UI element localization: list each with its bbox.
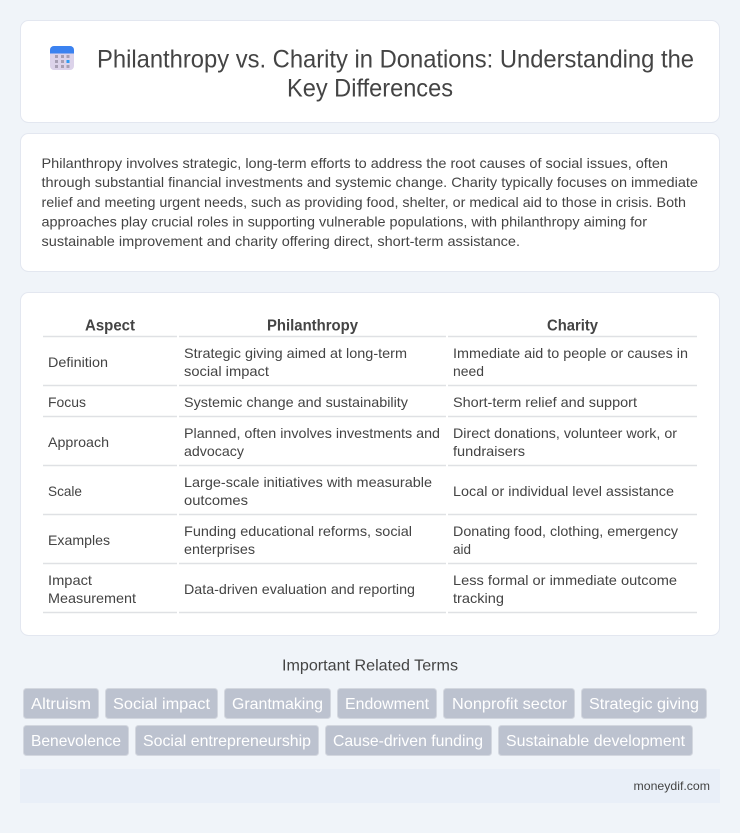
row: examples: Funding educational reforms, social xyxy=(184,523,412,539)
row: scale: Large-scale initiatives with measurable xyxy=(184,474,432,490)
row: focus: Focus xyxy=(48,394,86,410)
row: scale: Scale xyxy=(48,483,82,499)
row: definition: social impact xyxy=(184,363,269,379)
row: approach: Direct donations, volunteer work, or xyxy=(453,425,677,441)
row: impact measurement: tracking xyxy=(453,590,504,606)
tags: related terms xyxy=(24,688,706,756)
row: definition: need xyxy=(453,363,484,379)
row: impact measurement: Impact xyxy=(48,572,92,588)
row: examples: enterprises xyxy=(184,541,255,557)
text block: introduction xyxy=(42,155,698,249)
row: examples: aid xyxy=(453,541,471,557)
row: approach: advocacy xyxy=(184,443,244,459)
tags: related terms: Social entrepreneurship xyxy=(143,733,311,750)
tags: related terms: Strategic giving xyxy=(589,696,699,713)
tags: related terms: Nonprofit sector xyxy=(452,696,568,713)
row: focus: Systemic change and sustainability xyxy=(184,394,408,410)
row: definition: Definition xyxy=(48,354,108,370)
row: definition xyxy=(48,345,688,379)
footer: moneydif.com xyxy=(634,779,710,793)
title: Philanthropy vs. Charity in Donations: Understanding the xyxy=(97,46,694,74)
tags: related terms: Cause-driven funding xyxy=(333,733,483,750)
row: examples xyxy=(48,523,678,557)
tags: related terms: Grantmaking xyxy=(232,696,323,713)
row: impact measurement: Data-driven evaluation and reporting xyxy=(184,581,415,597)
row: impact measurement: Less formal or immediate outcome xyxy=(453,572,677,588)
text block: introduction: through substantial financial investments and systemic change. Charity typically focuses on immediate xyxy=(42,174,698,190)
row: definition: Immediate aid to people or causes in xyxy=(453,345,688,361)
tags: related terms: Sustainable development xyxy=(506,733,686,750)
table header xyxy=(85,318,598,334)
text block: introduction: sustainable improvement and charity offering direct, short-term assistance. xyxy=(42,233,520,249)
table header: Charity xyxy=(547,318,598,334)
row: examples: Examples xyxy=(48,532,110,548)
text block: introduction: relief and meeting urgent needs, such as providing food, shelter, or medical aid to those in crisis. Both xyxy=(42,194,686,210)
table grid lines xyxy=(43,336,697,612)
row: approach: Approach xyxy=(48,434,109,450)
tags: related terms: Benevolence xyxy=(31,733,121,750)
row: impact measurement: Measurement xyxy=(48,590,136,606)
row: approach: Planned, often involves investments and xyxy=(184,425,440,441)
panel: introduction xyxy=(20,134,720,272)
table header: Aspect xyxy=(85,318,136,334)
tags: related terms: Social impact xyxy=(113,696,211,713)
panel: comparison table xyxy=(20,292,720,636)
text block: introduction: Philanthropy involves strategic, long-term efforts to address the root causes of social issues, often xyxy=(42,155,668,171)
footer xyxy=(20,769,720,803)
tags: related terms: Endowment xyxy=(345,696,430,713)
row: focus: Short-term relief and support xyxy=(453,394,637,410)
title xyxy=(97,46,694,102)
heading: important related terms: Important Related Terms xyxy=(282,658,458,674)
text block: introduction: approaches play crucial roles in supporting vulnerable populations, with philanthropy aiming for xyxy=(42,214,647,230)
icon: calendar xyxy=(50,46,74,70)
title: Key Differences xyxy=(287,74,453,102)
table header: Philanthropy xyxy=(267,318,358,334)
row: focus xyxy=(48,394,637,410)
row: scale xyxy=(48,474,674,508)
row: impact measurement xyxy=(48,572,677,606)
tags: related terms: Altruism xyxy=(31,696,91,713)
row: approach: fundraisers xyxy=(453,443,525,459)
row: examples: Donating food, clothing, emergency xyxy=(453,523,678,539)
row: definition: Strategic giving aimed at long-term xyxy=(184,345,407,361)
panel: header xyxy=(20,20,720,122)
row: scale: Local or individual level assistance xyxy=(453,483,674,499)
row: approach xyxy=(48,425,677,459)
row: scale: outcomes xyxy=(184,492,248,508)
